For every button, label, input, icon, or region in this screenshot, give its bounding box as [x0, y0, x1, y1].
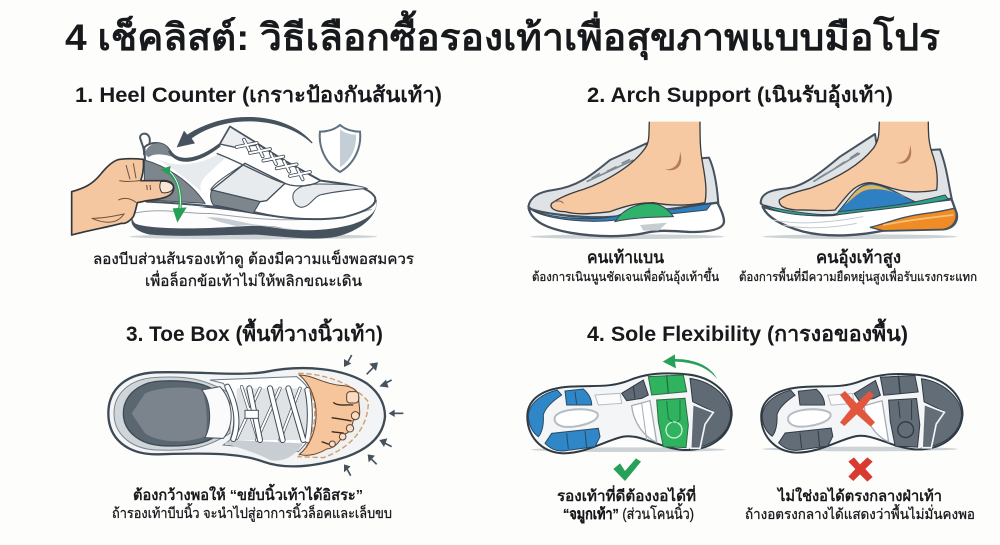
caption: heel counter: ลองบีบส่วนส้นรองเท้าดู ต้องมีความแข็งพอสมควร: [93, 249, 414, 268]
caption: bad flex: ถ้างอตรงกลางได้แสดงว่าพื้นไม่มั่นคงพอ: [745, 504, 975, 522]
icon: red cross mark: [848, 457, 873, 482]
icon: check mark: [613, 458, 641, 481]
illustration: good sole bending at forefoot: [527, 354, 732, 481]
caption: toe box: ถ้ารองเท้าบีบนิ้ว จะนำไปสู่อาการนิ้วล็อคและเล็บขบ: [112, 503, 392, 522]
caption: heel counter: เพื่อล็อกข้อเท้าไม่ให้พลิกขณะเดิน: [145, 270, 362, 290]
icon: red cross on midfoot: [840, 391, 875, 427]
heading: toe box: 3. Toe Box (พื้นที่วางนิ้วเท้า): [126, 318, 383, 346]
heading: heel counter: 1. Heel Counter (เกราะป้องกันส้นเท้า): [75, 83, 442, 107]
panel: toe box: [108, 318, 403, 522]
caption: high arch: [739, 248, 977, 285]
caption: flat foot: [532, 248, 719, 285]
icon: pressure arrows: [344, 355, 403, 476]
caption: good flex: [557, 485, 696, 524]
caption: high arch: ต้องการพื้นที่มีความยืดหยุ่นสูงเพื่อรับแรงกระแทก: [739, 267, 977, 285]
illustration: high arch shoe: [761, 122, 957, 239]
icon: curved arrow toward heel: [177, 117, 313, 147]
heading: arch support: 2. Arch Support (เนินรับอุ้งเท้า): [587, 83, 893, 109]
panel: arch support: [528, 83, 977, 285]
panel: sole flexibility: [527, 318, 975, 524]
caption: high arch: คนอุ้งเท้าสูง: [816, 248, 901, 269]
icon: green flex arrow: [160, 166, 187, 223]
caption: good flex: รองเท้าที่ดีต้องงอได้ที่: [557, 485, 696, 505]
title: 4 เช็คลิสต์: วิธีเลือกซื้อรองเท้าเพื่อสุขภาพแบบมือโปร: [65, 10, 940, 61]
caption: toe box: ต้องกว้างพอให้ “ขยับนิ้วเท้าได้อิสระ”: [133, 483, 363, 504]
illustration: flat foot shoe: [528, 122, 725, 239]
panel: heel counter: [72, 83, 442, 290]
illustration: top view of shoe with toes: [108, 355, 403, 476]
icon: green bend arrow: [663, 354, 717, 379]
caption: bad flex: [745, 486, 975, 522]
heading: sole flexibility: 4. Sole Flexibility (การงอของพื้น): [587, 318, 908, 346]
illustration: running shoe with hand squeezing heel: [72, 117, 377, 239]
caption: toe box: [112, 483, 392, 522]
caption: good flex: “จมูกเท้า” (ส่วนโคนนิ้ว): [563, 503, 694, 524]
icon: shield: [320, 125, 360, 172]
caption: flat foot: คนเท้าแบน: [587, 248, 664, 267]
caption: heel counter: [93, 249, 414, 290]
illustration: bad sole bending at midfoot: [761, 374, 963, 482]
caption: flat foot: ต้องการเนินนูนชัดเจนเพื่อดันอุ้งเท้าขึ้น: [532, 267, 719, 285]
icon: hand: [72, 159, 174, 235]
caption: bad flex: ไม่ใช่งอได้ตรงกลางฝ่าเท้า: [776, 486, 942, 505]
